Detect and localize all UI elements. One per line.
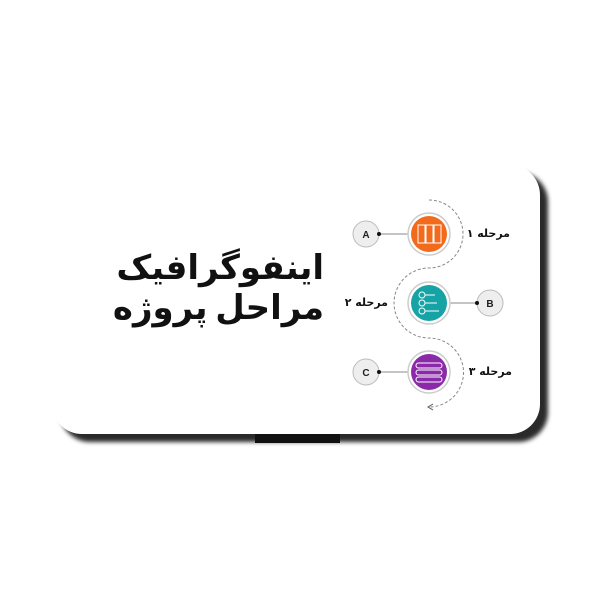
stage 2: B (486, 299, 494, 310)
title: اینفوگرافیک (116, 240, 324, 289)
card (52, 165, 540, 434)
dashed path (394, 200, 464, 410)
stage 3: C (362, 368, 370, 379)
stage 1 (353, 213, 450, 255)
title (113, 240, 324, 329)
label: stage 3: مرحله ۳ (469, 365, 512, 378)
card shadow (60, 172, 548, 442)
label: stage 1: مرحله ۱ (467, 227, 510, 240)
stage 1: A (362, 230, 370, 241)
stage 3 (353, 351, 450, 393)
stage 2 (408, 282, 503, 324)
title: مراحل پروژه (113, 280, 324, 329)
bottom bar (255, 432, 340, 443)
label: stage 2: مرحله ۲ (345, 296, 388, 309)
connector lines (379, 234, 477, 372)
